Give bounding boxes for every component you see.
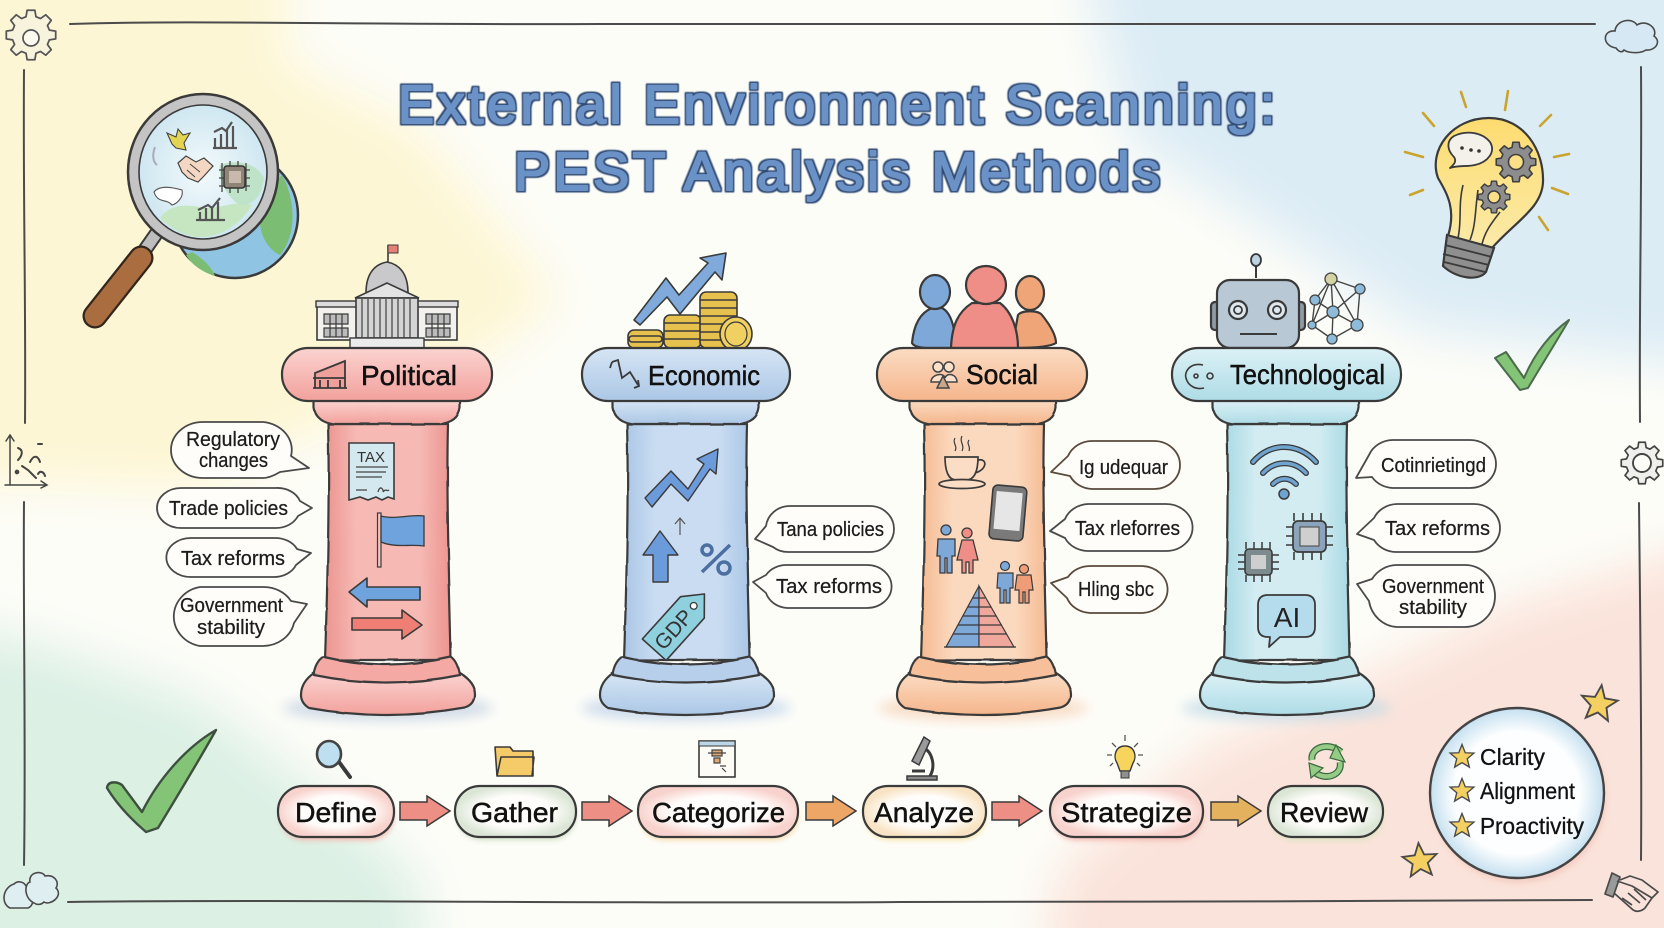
globe [172,152,298,278]
principle: Clarity: Clarity [1480,744,1545,770]
icon: scatter chart left [5,435,47,488]
icon: star upper [1579,683,1620,722]
icon: tax document [349,443,394,500]
icon: microscope [907,737,937,780]
icon: star lower [1401,842,1438,877]
icon: gear right [1621,442,1663,484]
icon: large green check [107,730,216,832]
icon: smartphone [989,485,1027,541]
heading: Social: Social [966,359,1038,390]
icon: percent mark [702,545,730,574]
icon: GDP tag [642,583,716,660]
callout: Hling sbc [1051,566,1168,613]
icon: AI speech bubble: AI [1274,602,1300,633]
icon: AI speech bubble [1258,595,1315,647]
icon: couple large [937,525,978,573]
icon: search [317,741,350,777]
arrow [992,796,1042,826]
callout: Government stability: Government [1382,576,1484,598]
icon: wifi signal [1253,447,1316,499]
pillar shadows [283,695,1391,721]
icon: technological header [1186,364,1213,389]
step: Strategize: Strategize [1061,797,1192,828]
callout: Tax reforms [166,538,311,577]
icon: chip large [1286,513,1333,560]
icon: category card [699,741,735,777]
icon: population pyramid [944,586,1016,647]
heading: Political: Political [361,360,457,391]
callout: Tax rleforres [1050,504,1193,551]
step: Categorize: Categorize [652,797,785,828]
icon: blue flag [378,513,424,567]
callout: Government stability: stability [197,617,265,639]
handle [95,234,156,316]
panel: Political pillar [282,245,492,715]
step: Review: Review [1280,797,1369,828]
panel: Social pillar [877,266,1087,715]
callout: Government stability [174,587,307,646]
icon: refresh arrows [1309,745,1345,778]
capital label plate [282,348,492,401]
capital label plate [1172,348,1401,401]
icon: GDP tag: GDP [650,605,698,655]
title: PEST Analysis Methods [514,142,1160,202]
callout: Tana policies [755,506,894,552]
panel: Technological pillar [1172,254,1401,715]
title [398,75,1275,202]
arrow [1211,796,1261,826]
gear small [1478,181,1510,213]
callout: Tax reforms: Tax reforms [1385,518,1490,540]
callout: Cotinrietingd [1356,440,1496,488]
column body [600,400,774,715]
icon: corner cloud bottom left [4,873,58,908]
callout: Tax reforms: Tax reforms [181,548,285,570]
icon: handshake corner [1605,873,1658,911]
gear large [1496,142,1536,182]
callout: Regulatory changes: Regulatory [186,429,280,451]
icon: red right arrow [352,610,422,639]
icon: magnifying glass over globe [95,94,298,316]
icon: network graph [1308,273,1365,344]
panel: Political factor bubbles [157,422,312,646]
callout: Government stability: Government [180,595,283,617]
screw base [1443,235,1494,278]
column body [1200,400,1374,715]
panel: Technological factor bubbles [1356,440,1500,627]
column body [301,400,475,715]
step: Analyze: Analyze [874,797,974,828]
icon: rising arrow and coins [628,253,752,351]
callout: Tax reforms [1357,504,1500,552]
icon: tax document: TAX [357,449,385,466]
icon: robot head [1211,254,1305,348]
panel: Social factor bubbles [1050,441,1193,613]
title: External Environment Scanning: [398,75,1275,135]
panel: key principles circle [1430,708,1606,883]
callout: Ig udequar: Ig udequar [1079,457,1168,479]
icon: political header [313,361,347,388]
icon: light bulb [1405,91,1569,278]
arrow [582,796,632,826]
icon: economic header [610,360,639,388]
filaments [1458,185,1500,244]
step: Define: Define [295,797,377,828]
callout: Hling sbc: Hling sbc [1078,579,1154,601]
arrow [806,796,856,826]
capital label plate [582,348,790,401]
capital label plate [877,348,1087,401]
callout: Ig udequar [1051,441,1180,489]
icon: small bulb [1107,735,1143,778]
callout: Tax reforms [753,565,892,608]
speech bubble [1448,133,1492,168]
step: Gather: Gather [471,797,558,828]
callout: Tax rleforres: Tax rleforres [1075,518,1180,540]
step: Analyze [863,786,986,840]
principle: Alignment: Alignment [1480,778,1576,804]
icon: couple small [997,562,1033,603]
lens [128,94,278,250]
process flow [278,735,1383,840]
icon: capitol building [316,245,458,348]
callout: Tax reforms: Tax reforms [776,576,882,598]
icon: blue left arrow [349,578,420,607]
callout: Regulatory changes: changes [199,450,268,472]
principle: Proactivity: Proactivity [1480,813,1584,839]
icon: three people [912,266,1056,348]
step: Define [278,786,394,840]
step: Review [1268,786,1383,840]
icon: zigzag arrow [645,449,718,507]
icon: corner gear [6,10,56,60]
column body [897,400,1071,715]
callout: Tana policies: Tana policies [777,519,884,541]
callout: Government stability: stability [1399,597,1467,619]
callout: Trade policies [157,488,312,528]
step: Gather [455,786,576,840]
icon: folder [495,747,534,776]
panel: Economic factor bubbles [753,506,894,608]
icon: coffee cup [939,436,985,488]
callout: Government stability [1357,565,1495,627]
panel: Economic pillar [582,253,790,715]
step: Strategize [1050,786,1203,840]
icon: chip small [1238,542,1279,582]
callout: Regulatory changes [171,422,309,478]
principle: Clarity [1450,744,1545,770]
heading: Technological: Technological [1230,359,1385,390]
icon: up arrows [643,518,685,582]
heading: Economic: Economic [648,360,760,391]
icon: corner cloud top right [1605,20,1658,53]
rays [1405,91,1569,230]
icon: green check top right [1495,320,1569,390]
step: Categorize [638,786,798,840]
callout: Trade policies: Trade policies [169,498,288,520]
glass [1436,118,1543,248]
arrow [400,796,450,826]
icon: social header [931,362,957,388]
callout: Cotinrietingd: Cotinrietingd [1381,455,1486,477]
